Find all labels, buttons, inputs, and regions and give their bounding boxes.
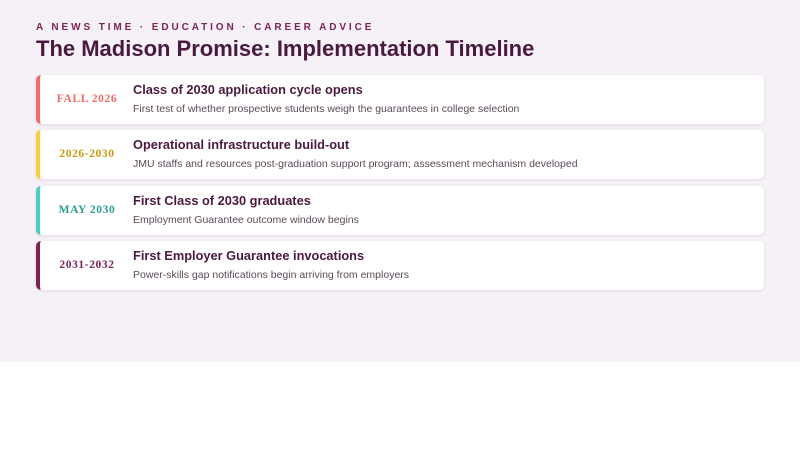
kicker: A NEWS TIME · EDUCATION · CAREER ADVICE [36, 22, 374, 33]
card: fall 2026: First test of whether prospective students weigh the guarantees in college selection [133, 103, 519, 115]
card: may 2030: MAY 2030 [59, 204, 115, 216]
card: may 2030: Employment Guarantee outcome window begins [133, 214, 359, 226]
card: fall 2026: FALL 2026 [57, 93, 117, 105]
card: fall 2026 [36, 75, 764, 124]
title: The Madison Promise: Implementation Timeline [36, 36, 534, 61]
card: fall 2026: Class of 2030 application cycle opens [133, 82, 363, 97]
card: 2031-2032: 2031-2032 [59, 259, 115, 271]
card: 2026-2030: Operational infrastructure build-out [133, 137, 349, 152]
card: 2031-2032: Power-skills gap notifications begin arriving from employers [133, 269, 409, 281]
card: 2031-2032 [36, 241, 764, 290]
card: 2026-2030: 2026-2030 [59, 148, 115, 160]
card: may 2030 [36, 186, 764, 235]
card: 2026-2030 [36, 130, 764, 179]
card: may 2030: First Class of 2030 graduates [133, 193, 311, 208]
card: 2031-2032: First Employer Guarantee invocations [133, 248, 364, 263]
card: 2026-2030: JMU staffs and resources post-graduation support program; assessment mechanism developed [133, 158, 578, 170]
